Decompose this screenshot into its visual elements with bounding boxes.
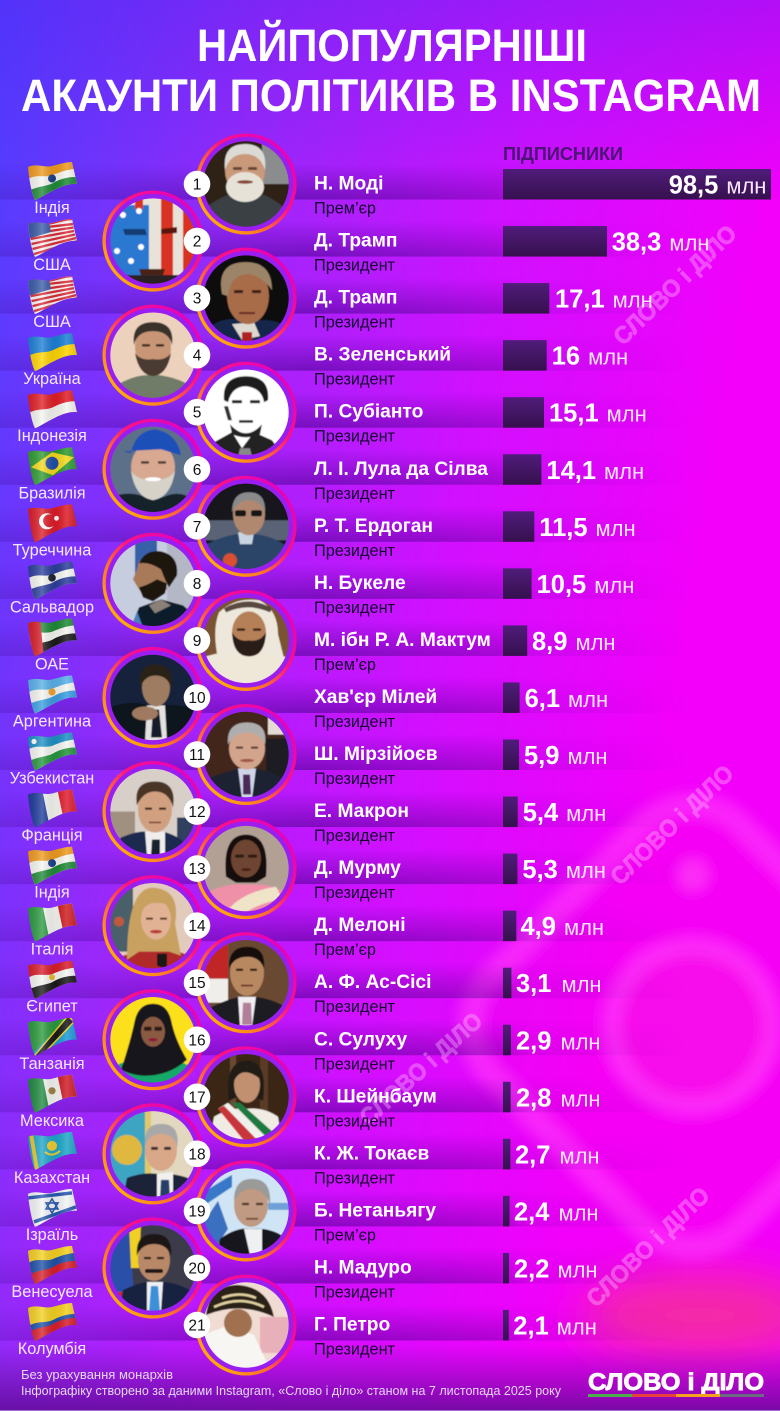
rank badge xyxy=(184,1198,210,1224)
rank badge xyxy=(184,627,210,654)
row 16 xyxy=(19,991,601,1089)
row 17 xyxy=(20,1048,601,1146)
watermark: Слово і діло: СЛОВО і ДІЛО xyxy=(581,1182,715,1313)
rank badge xyxy=(184,741,210,768)
value: 4,9 млн xyxy=(520,913,604,941)
value: 5,3 млн xyxy=(522,856,606,884)
flag: Turkey xyxy=(28,504,77,542)
rank badge: 6 xyxy=(193,462,201,479)
avatar: Subianto xyxy=(197,363,295,461)
role: Президент xyxy=(314,1055,396,1073)
bar xyxy=(503,511,534,542)
row 3 xyxy=(26,249,653,347)
avatar: Milei xyxy=(104,649,202,746)
value: 10,5 млн xyxy=(537,571,634,599)
country label: Бразилія xyxy=(18,484,86,502)
country label: Танзанія xyxy=(19,1055,85,1073)
bar xyxy=(503,1025,511,1055)
flag: India xyxy=(28,162,77,200)
row 14 xyxy=(26,877,604,975)
rank badge: 1 xyxy=(193,176,201,194)
bar xyxy=(503,854,517,884)
rank badge xyxy=(184,570,210,597)
row 6 xyxy=(18,420,644,518)
name: Н. Мадуро xyxy=(314,1257,412,1278)
row 9 xyxy=(26,592,616,689)
avatar: Petro xyxy=(197,1276,295,1374)
value: 3,1 млн xyxy=(516,970,602,998)
avatar: Maktoum xyxy=(197,592,295,689)
avatar: Erdogan xyxy=(197,477,295,575)
name: Л. І. Лула да Сілва xyxy=(314,459,488,480)
name: С. Сулуху xyxy=(314,1029,408,1050)
rank badge: 11 xyxy=(189,747,205,764)
name: Д. Трамп xyxy=(314,288,398,309)
role: Президент xyxy=(314,1283,396,1301)
value: 15,1 млн xyxy=(549,400,647,428)
bar xyxy=(503,397,544,428)
watermark: Слово і діло: СЛОВО і ДІЛО xyxy=(608,220,742,351)
rank badge: 17 xyxy=(188,1089,206,1106)
value: 16 млн xyxy=(552,343,628,371)
bar xyxy=(503,169,771,200)
watermark: Слово і діло: СЛОВО і ДІЛО xyxy=(605,760,739,891)
bar xyxy=(503,283,549,314)
rank badge: 8 xyxy=(193,576,201,593)
role: Президент xyxy=(314,1340,396,1358)
name: М. ібн Р. А. Мактум xyxy=(314,630,491,651)
avatar: Bukele xyxy=(104,534,202,632)
rank badge xyxy=(184,513,210,540)
rank badge: 2 xyxy=(193,234,201,251)
name: К. Ж. Токаєв xyxy=(314,1143,429,1164)
rank badge: 12 xyxy=(188,804,206,821)
rank badge xyxy=(184,228,210,254)
rank badge: 16 xyxy=(188,1032,206,1049)
name: А. Ф. Ас-Сісі xyxy=(314,972,431,993)
flag: USA xyxy=(28,276,77,314)
avatar: Trump xyxy=(197,249,295,347)
row shading bands xyxy=(0,168,633,1340)
name: Е. Макрон xyxy=(314,801,409,822)
rank badge xyxy=(184,285,210,311)
title: НАЙПОПУЛЯРНІШІ xyxy=(197,20,587,71)
row 7 xyxy=(13,477,636,575)
bar xyxy=(503,625,527,656)
country label: Україна xyxy=(23,370,82,388)
role: Президент xyxy=(314,827,396,845)
rank badge xyxy=(184,912,210,939)
bar xyxy=(503,797,518,827)
bar xyxy=(503,454,541,485)
role: Президент xyxy=(314,428,396,446)
avatar: Lula xyxy=(104,420,202,518)
row 21 xyxy=(18,1276,597,1374)
rank badge xyxy=(184,171,210,197)
bar xyxy=(503,340,547,371)
flag: Colombia xyxy=(26,1301,80,1345)
role: Президент xyxy=(314,542,396,560)
flag: Venezuela xyxy=(26,1244,80,1288)
bar xyxy=(503,1253,509,1283)
rank badge xyxy=(184,684,210,711)
row 19 xyxy=(26,1162,599,1260)
flag: Israel xyxy=(26,1187,80,1231)
name: В. Зеленський xyxy=(314,345,451,366)
rank badge xyxy=(184,855,210,882)
country label: Мексика xyxy=(20,1112,85,1130)
bar xyxy=(503,968,511,998)
flag: Indonesia xyxy=(28,390,77,428)
row 1 xyxy=(26,135,771,233)
rank badge xyxy=(184,1255,210,1281)
avatar: Zelensky xyxy=(104,306,202,404)
value: 5,4 млн xyxy=(523,799,606,827)
rank badge: 9 xyxy=(193,633,201,650)
logo: Слово і діло: СЛОВО і ДІЛО xyxy=(588,1369,764,1396)
country label: Індонезія xyxy=(17,427,87,445)
role: Прем’єр xyxy=(314,941,376,959)
bar xyxy=(503,740,519,770)
role: Президент xyxy=(314,998,396,1016)
row 15 xyxy=(26,934,602,1032)
bar xyxy=(503,226,607,257)
rank badge: 4 xyxy=(193,348,202,365)
rank badge: 20 xyxy=(188,1260,206,1277)
flag: Uzbekistan xyxy=(28,732,77,770)
role: Президент xyxy=(314,485,396,503)
avatar: Samia Suluhu xyxy=(104,991,202,1089)
row 2 xyxy=(26,192,709,290)
row 18 xyxy=(14,1105,600,1203)
role: Президент xyxy=(314,1112,396,1130)
role: Президент xyxy=(314,257,396,275)
row 8 xyxy=(10,534,634,632)
country label: Індія xyxy=(34,884,70,902)
watermark: Слово і діло xyxy=(355,220,742,1313)
name: Г. Петро xyxy=(314,1314,390,1336)
row 11 xyxy=(10,706,608,803)
avatar: Mirziyoyev xyxy=(197,706,295,803)
role: Президент xyxy=(314,314,396,332)
title xyxy=(21,20,761,121)
name: Р. Т. Ердоган xyxy=(314,516,433,537)
role: Президент xyxy=(314,884,396,902)
value: 5,9 млн xyxy=(524,742,608,770)
country label: Казахстан xyxy=(14,1169,90,1187)
bar xyxy=(503,1310,509,1340)
column heading: subscribers: ПІДПИСНИКИ xyxy=(503,143,623,164)
country label: Колумбія xyxy=(18,1340,86,1358)
flag: France xyxy=(28,790,77,828)
value: 2,1 млн xyxy=(513,1312,597,1340)
row 5 xyxy=(17,363,647,461)
rank badge: 15 xyxy=(188,975,206,992)
role: Президент xyxy=(314,599,396,617)
name: Д. Мурму xyxy=(314,858,401,879)
rank badge xyxy=(184,399,210,426)
country label: Туреччина xyxy=(13,541,92,559)
avatar: Netanyahu xyxy=(197,1162,295,1260)
country label: Венесуела xyxy=(11,1283,94,1301)
value: 2,2 млн xyxy=(514,1255,598,1283)
role: Президент xyxy=(314,371,396,389)
rank badge xyxy=(184,969,210,996)
bar xyxy=(503,1082,511,1112)
rank badge xyxy=(184,1084,210,1110)
role: Президент xyxy=(314,770,396,788)
rank badge: 14 xyxy=(188,918,206,935)
flag: Brazil xyxy=(28,447,77,486)
name: Д. Мелоні xyxy=(314,915,406,936)
rank badge xyxy=(184,456,210,483)
avatar: Trump flag portrait xyxy=(104,192,202,290)
rank badge: 19 xyxy=(188,1203,206,1220)
flag: El Salvador xyxy=(28,562,77,600)
rank badge xyxy=(184,1026,210,1053)
flag: Argentina xyxy=(28,676,77,714)
value: 8,9 млн xyxy=(532,628,616,656)
value: 11,5 млн xyxy=(539,514,636,542)
avatar: Meloni xyxy=(104,877,202,975)
name: Н. Моді xyxy=(314,174,383,194)
rank badge xyxy=(184,798,210,825)
flag: Tanzania xyxy=(26,1016,80,1060)
row 20 xyxy=(11,1219,598,1317)
flag: Mexico xyxy=(26,1073,80,1117)
footer notes xyxy=(21,1367,561,1398)
flag: Egypt xyxy=(26,959,80,1003)
role: Прем’єр xyxy=(314,1226,376,1244)
bar xyxy=(503,911,516,941)
rank badge: 5 xyxy=(193,405,201,422)
rank badge xyxy=(184,342,210,368)
value: 2,9 млн xyxy=(516,1027,601,1055)
role: Президент xyxy=(314,713,396,731)
value: 14,1 млн xyxy=(546,457,644,485)
bar xyxy=(503,682,520,713)
flag: Italy xyxy=(26,902,80,946)
rank badge: 10 xyxy=(188,690,206,707)
country label: Сальвадор xyxy=(10,598,94,616)
country label: США xyxy=(33,313,71,331)
country label: Індія xyxy=(34,199,70,217)
footer notes: Інфографіку створено за даними Instagram, «Слово і діло» станом на 7 листопада 2025 року xyxy=(21,1383,561,1398)
value: 2,8 млн xyxy=(516,1084,601,1112)
value: 2,4 млн xyxy=(514,1198,599,1226)
avatar: Maduro xyxy=(104,1219,202,1317)
flag: Kazakhstan xyxy=(26,1130,80,1174)
country label: Аргентина xyxy=(13,712,92,730)
value: 38,3 млн xyxy=(612,229,709,257)
country label: Узбекистан xyxy=(10,770,94,788)
country label: ОАЕ xyxy=(35,655,69,673)
flag: UAE xyxy=(28,618,77,656)
name: Б. Нетаньягу xyxy=(314,1200,436,1221)
country label: Єгипет xyxy=(26,998,78,1016)
value: 98,5 млн xyxy=(669,172,766,200)
rank badge xyxy=(184,1141,210,1167)
avatar: Macron xyxy=(104,763,202,860)
role: Прем’єр xyxy=(314,656,376,674)
avatar: Modi xyxy=(197,135,295,233)
footer notes: Без урахування монархів xyxy=(21,1367,173,1382)
row 10 xyxy=(13,649,608,746)
country label: США xyxy=(33,256,71,274)
rank badge: 3 xyxy=(193,291,201,308)
watermark: Слово і діло: СЛОВО і ДІЛО xyxy=(355,1007,488,1131)
avatar: Sheinbaum xyxy=(197,1048,295,1146)
role: Президент xyxy=(314,1169,396,1187)
avatar: Murmu xyxy=(197,820,295,918)
bar xyxy=(503,1196,510,1226)
rank badge: 18 xyxy=(188,1146,206,1163)
name: Ш. Мірзійоєв xyxy=(314,744,438,765)
rank badge xyxy=(184,1312,210,1338)
rank badge: 7 xyxy=(193,519,201,536)
value: 17,1 млн xyxy=(555,286,653,314)
rank badge: 13 xyxy=(188,861,206,878)
value: 6,1 млн xyxy=(525,685,608,713)
value: 2,7 млн xyxy=(515,1141,600,1169)
role: Прем’єр xyxy=(314,200,376,218)
bar xyxy=(503,1139,510,1169)
name: Хав'єр Мілей xyxy=(314,687,437,708)
flag: India xyxy=(28,846,77,884)
row 13 xyxy=(26,820,606,918)
name: К. Шейнбаум xyxy=(314,1086,437,1107)
name: Д. Трамп xyxy=(314,231,398,252)
bar xyxy=(503,568,532,599)
flag: USA xyxy=(28,219,77,257)
row 12 xyxy=(21,763,606,860)
country label: Ізраїль xyxy=(26,1226,78,1244)
avatar: Tokayev xyxy=(104,1105,202,1203)
name: П. Субіанто xyxy=(314,402,423,423)
name: Н. Букеле xyxy=(314,573,406,594)
avatar: El-Sisi xyxy=(197,934,295,1032)
rank badge: 21 xyxy=(188,1318,206,1334)
country label: Франція xyxy=(21,827,83,845)
country label: Італія xyxy=(31,941,73,959)
row 4 xyxy=(23,306,628,404)
flag: Ukraine xyxy=(28,333,77,371)
